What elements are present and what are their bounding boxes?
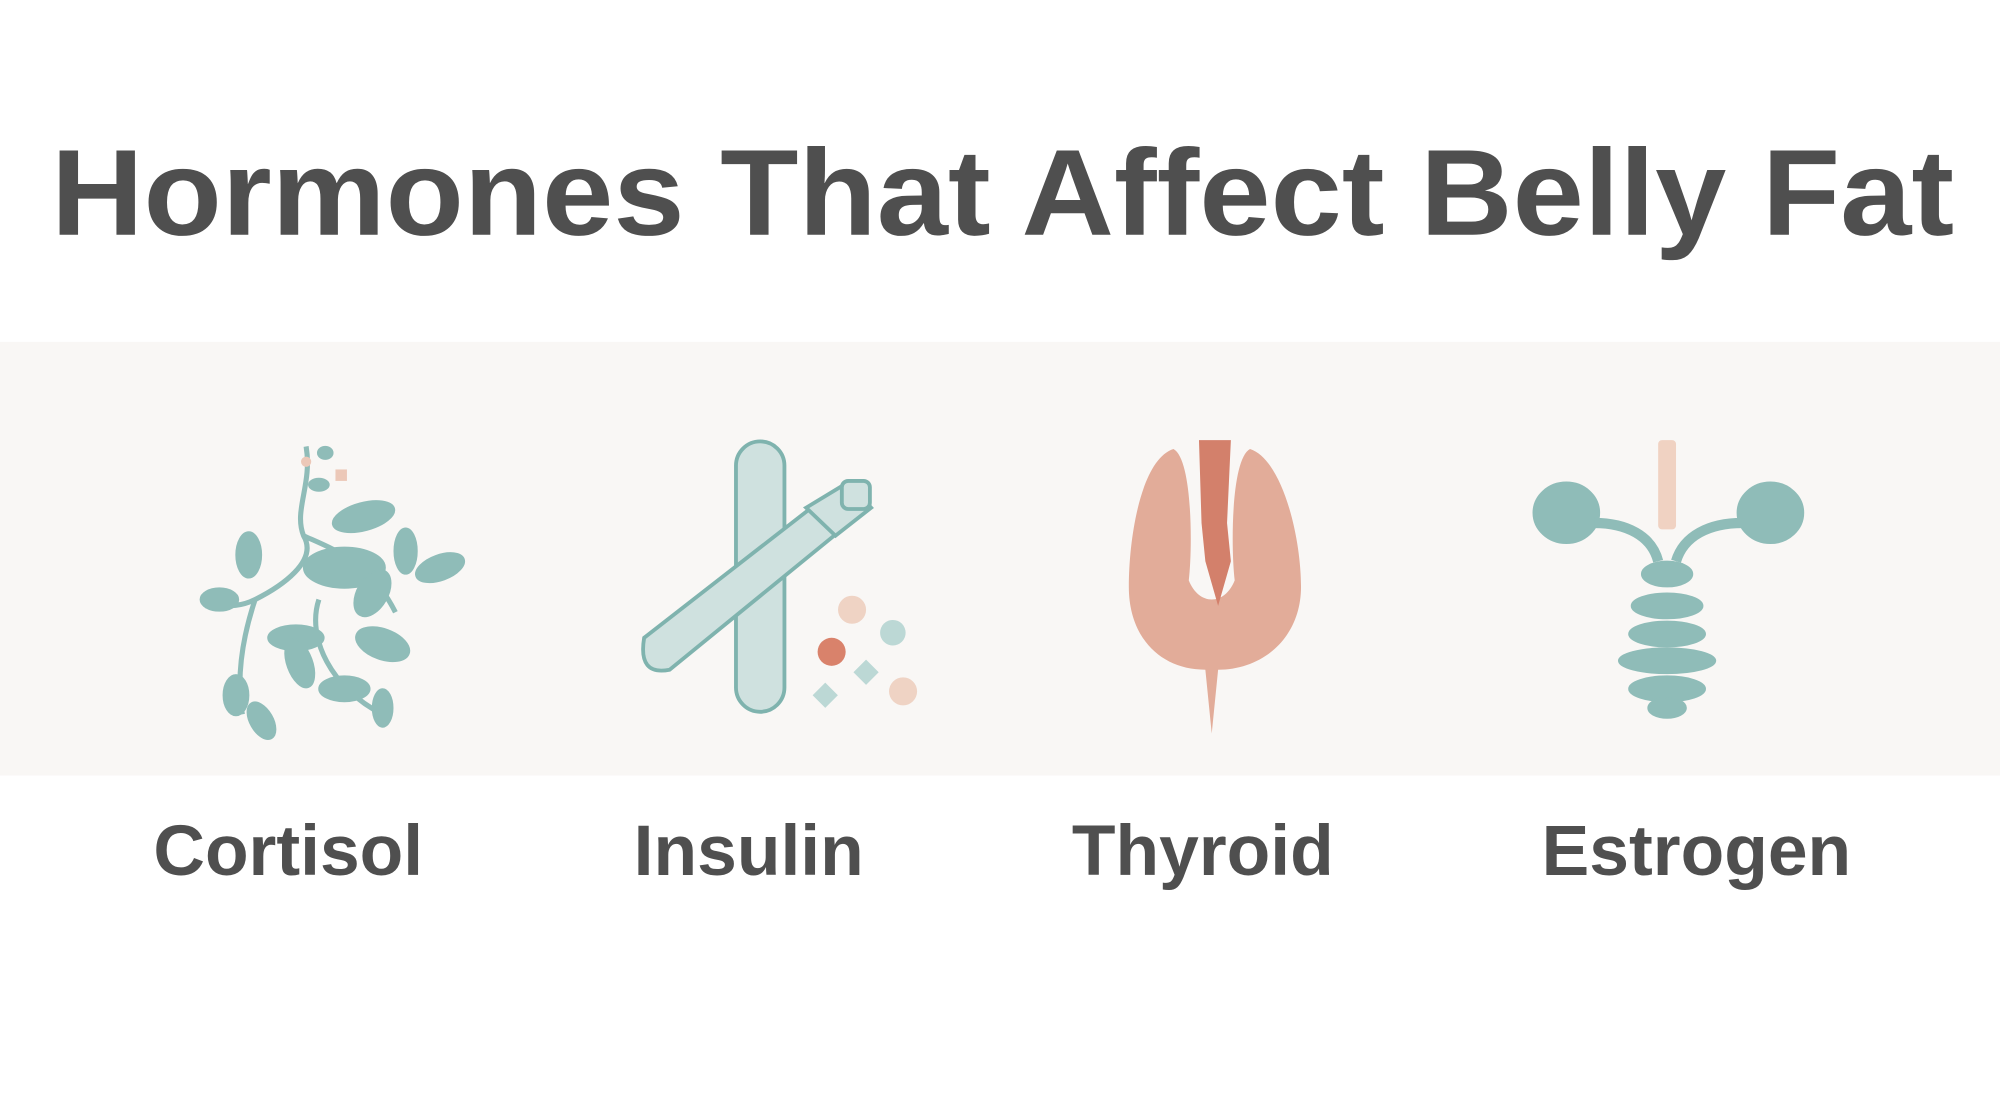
- label: estrogen: Estrogen: [1542, 811, 1851, 891]
- label: cortisol: Cortisol: [153, 811, 423, 891]
- icon: cortisol accents: [301, 457, 347, 481]
- title: Hormones That Affect Belly Fat: [51, 124, 1954, 261]
- icon: insulin dots: [813, 596, 917, 708]
- label: insulin: Insulin: [634, 811, 864, 891]
- label: thyroid: Thyroid: [1072, 811, 1334, 891]
- icon: thyroid: [1129, 440, 1301, 733]
- panel: icon band: [0, 342, 2000, 776]
- icon: estrogen: [1533, 440, 1804, 718]
- icon: insulin pen: [643, 441, 871, 712]
- icon: cortisol vine: [200, 446, 468, 744]
